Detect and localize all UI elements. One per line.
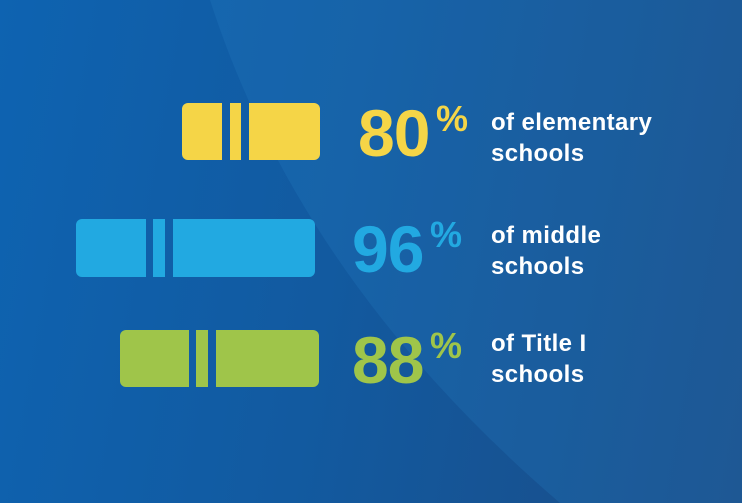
label: Title I: schools: [491, 361, 584, 388]
bar: Title I: [120, 330, 319, 387]
label: elementary: of elementary: [491, 109, 652, 136]
label: middle: [491, 222, 601, 280]
stat: 88%: 88: [352, 323, 423, 397]
stat: 88%: [352, 323, 462, 397]
stat: 80%: [358, 96, 468, 170]
label: elementary: [491, 109, 652, 167]
label: elementary: schools: [491, 140, 584, 167]
stat: 80%: %: [436, 98, 468, 139]
label: Title I: [491, 330, 587, 388]
label: middle: of middle: [491, 222, 601, 249]
label: middle: schools: [491, 253, 584, 280]
bar: elementary: [182, 103, 320, 160]
stat: 96%: 96: [352, 212, 423, 286]
stat: 96%: %: [430, 214, 462, 255]
label: Title I: of Title I: [491, 330, 587, 357]
stat: 80%: 80: [358, 96, 429, 170]
stat: 88%: %: [430, 325, 462, 366]
stat: 96%: [352, 212, 462, 286]
bar: middle: [76, 219, 315, 277]
